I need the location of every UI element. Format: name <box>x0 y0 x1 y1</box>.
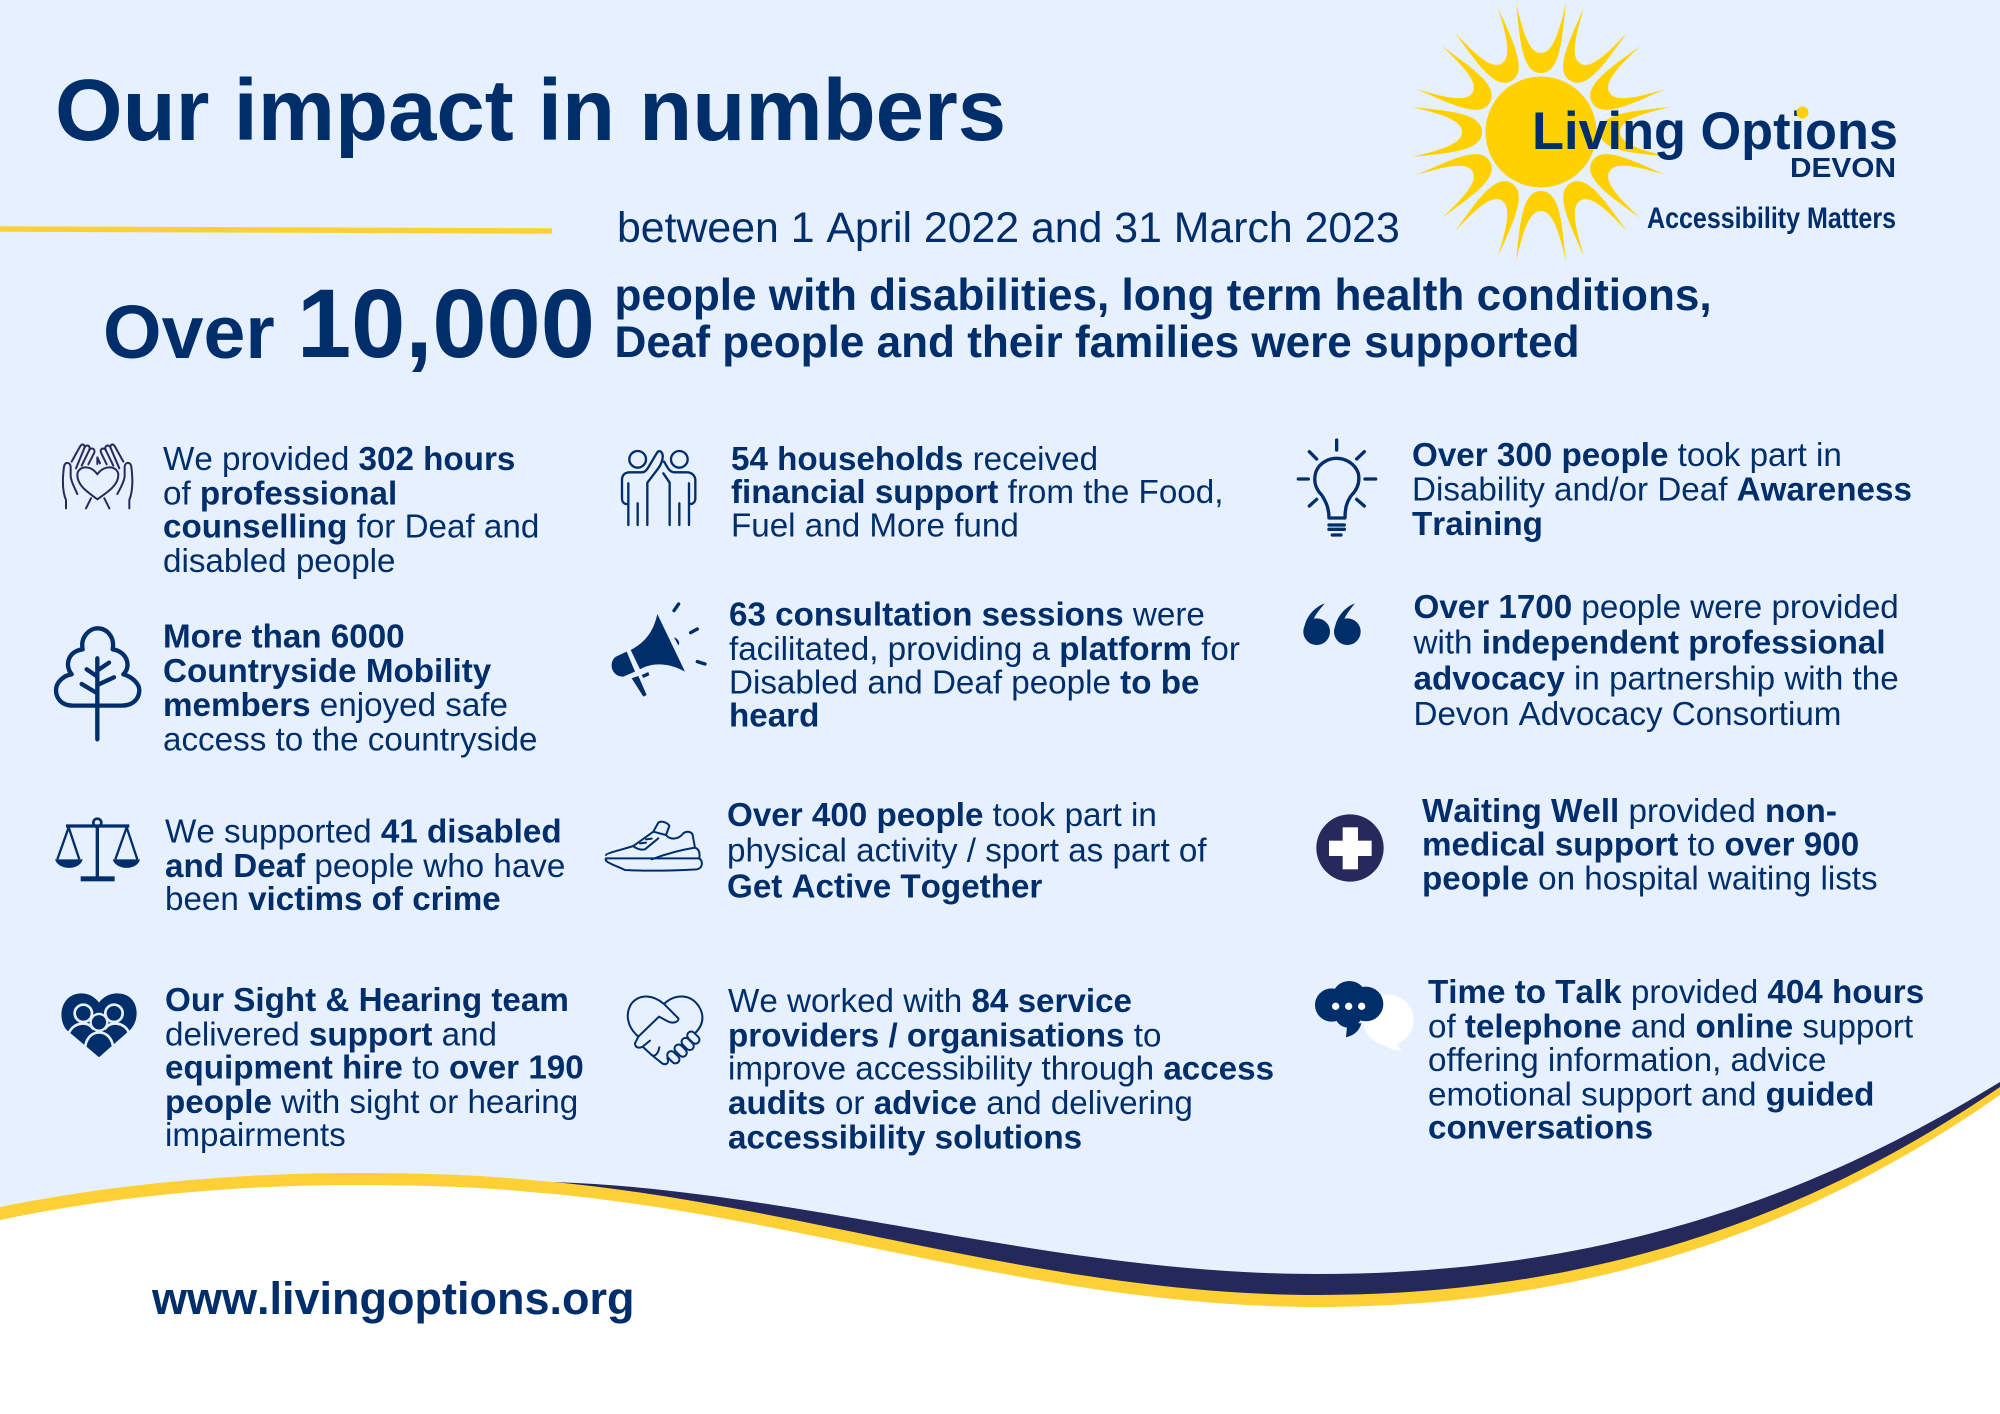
wave: navy band <box>553 1082 2000 1414</box>
logo tagline: Accessibility Matters <box>1647 202 1896 235</box>
text <box>165 982 584 1154</box>
icon: quotation marks <box>1303 603 1361 645</box>
text: been victims of crime <box>165 881 501 918</box>
icon: heart with people <box>61 993 137 1057</box>
icon: hands holding heart <box>63 444 132 508</box>
logo DEVON: DEVON <box>1790 152 1896 183</box>
text: 54 households received <box>731 441 1098 478</box>
text: members enjoyed safe <box>163 687 508 724</box>
text: Time to Talk provided 404 hours <box>1428 974 1924 1011</box>
supported text: people with disabilities, long term health conditions, <box>614 271 1712 320</box>
10,000: 10,000 <box>297 269 595 378</box>
text: counselling for Deaf and <box>163 508 539 545</box>
wave: yellow band <box>0 1087 2000 1414</box>
text: offering information, advice <box>1428 1042 1826 1079</box>
text: physical activity / sport as part of <box>727 832 1207 869</box>
website url: www.livingoptions.org <box>151 1273 634 1324</box>
logo yellow dot <box>1796 106 1808 118</box>
text: medical support to over 900 <box>1422 826 1859 863</box>
text: Disabled and Deaf people to be <box>729 664 1199 701</box>
text <box>1422 793 1878 898</box>
text <box>165 813 565 918</box>
headline statistic <box>103 269 1712 378</box>
text <box>163 441 539 580</box>
footer white area <box>0 1095 2000 1414</box>
text: We worked with 84 service <box>728 983 1132 1020</box>
text: Over 1700 people were provided <box>1414 589 1899 626</box>
text: with independent professional <box>1412 625 1886 662</box>
date range subtitle: between 1 April 2022 and 31 March 2023 <box>617 204 1400 252</box>
text: Over 300 people took part in <box>1412 437 1842 474</box>
text: and Deaf people who have <box>165 848 565 885</box>
text: facilitated, providing a platform for <box>729 631 1240 668</box>
text: financial support from the Food, <box>731 474 1223 511</box>
text: conversations <box>1428 1109 1653 1146</box>
headline statistic: Deaf people and their families were supported <box>614 318 1580 367</box>
text <box>1428 974 1924 1146</box>
text: impairments <box>165 1117 346 1154</box>
text <box>1412 437 1912 543</box>
stat: advocacy <box>1303 589 1899 733</box>
text: people with sight or hearing <box>165 1084 578 1121</box>
text <box>1412 589 1899 733</box>
text: advocacy in partnership with the <box>1414 660 1899 697</box>
text: 63 consultation sessions were <box>729 596 1205 633</box>
title: Our impact in numbers <box>55 62 1006 159</box>
icon: sun <box>1412 3 1670 261</box>
text: Over 400 people took part in <box>727 797 1157 834</box>
yellow accent line <box>0 229 552 231</box>
stat: countryside mobility <box>56 618 537 759</box>
text <box>731 441 1223 544</box>
text: emotional support and guided <box>1428 1076 1874 1113</box>
logo wordmark: Living Options <box>1532 102 1898 161</box>
icon: speech bubbles <box>1315 981 1414 1051</box>
text: people on hospital waiting lists <box>1422 861 1878 898</box>
stat: victims of crime <box>55 813 565 918</box>
text: Get Active Together <box>727 868 1042 905</box>
text <box>728 983 1274 1156</box>
text: We supported 41 disabled <box>165 813 562 850</box>
stat: time to talk <box>1315 974 1924 1146</box>
text: We provided 302 hours <box>163 441 515 478</box>
icon: handshake heart <box>628 996 702 1065</box>
text: improve accessibility through access <box>728 1050 1274 1087</box>
text: providers / organisations to <box>728 1017 1161 1054</box>
text: Countryside Mobility <box>163 653 492 690</box>
icon: scales <box>55 819 140 881</box>
logo: Living Options Devon <box>1412 3 1898 261</box>
text: accessibility solutions <box>728 1119 1082 1156</box>
text: Disability and/or Deaf Awareness <box>1412 472 1912 509</box>
stat: consultation sessions <box>612 596 1240 734</box>
icon: medical cross <box>1316 814 1384 882</box>
icon: megaphone <box>612 604 705 697</box>
text <box>729 596 1240 734</box>
text: audits or advice and delivering <box>728 1085 1193 1122</box>
text: heard <box>729 697 819 734</box>
text: Training <box>1412 506 1543 543</box>
text: of professional <box>163 475 397 512</box>
text: disabled people <box>163 543 396 580</box>
text: Our Sight & Hearing team <box>165 982 569 1019</box>
stat: get active together <box>606 797 1207 905</box>
text: delivered support and <box>165 1016 497 1053</box>
stat: waiting well <box>1316 793 1878 898</box>
icon: two people high five <box>622 451 695 525</box>
stat: counselling <box>63 441 539 580</box>
stat: awareness training <box>1298 437 1912 543</box>
stat: financial support <box>622 441 1223 544</box>
text: equipment hire to over 190 <box>165 1049 584 1086</box>
icon: lightbulb <box>1298 440 1376 535</box>
text: Devon Advocacy Consortium <box>1414 696 1841 733</box>
text: More than 6000 <box>163 618 405 655</box>
text <box>727 797 1207 905</box>
stat: sight and hearing <box>61 982 584 1154</box>
text: Fuel and More fund <box>731 507 1019 544</box>
icon: tree <box>56 628 139 739</box>
Over: Over <box>103 290 275 374</box>
text: access to the countryside <box>163 722 537 759</box>
text: Waiting Well provided non- <box>1422 793 1837 830</box>
text: of telephone and online support <box>1428 1009 1913 1046</box>
text <box>163 618 537 759</box>
stat: service providers <box>628 983 1274 1156</box>
icon: trainer shoe <box>606 822 702 871</box>
